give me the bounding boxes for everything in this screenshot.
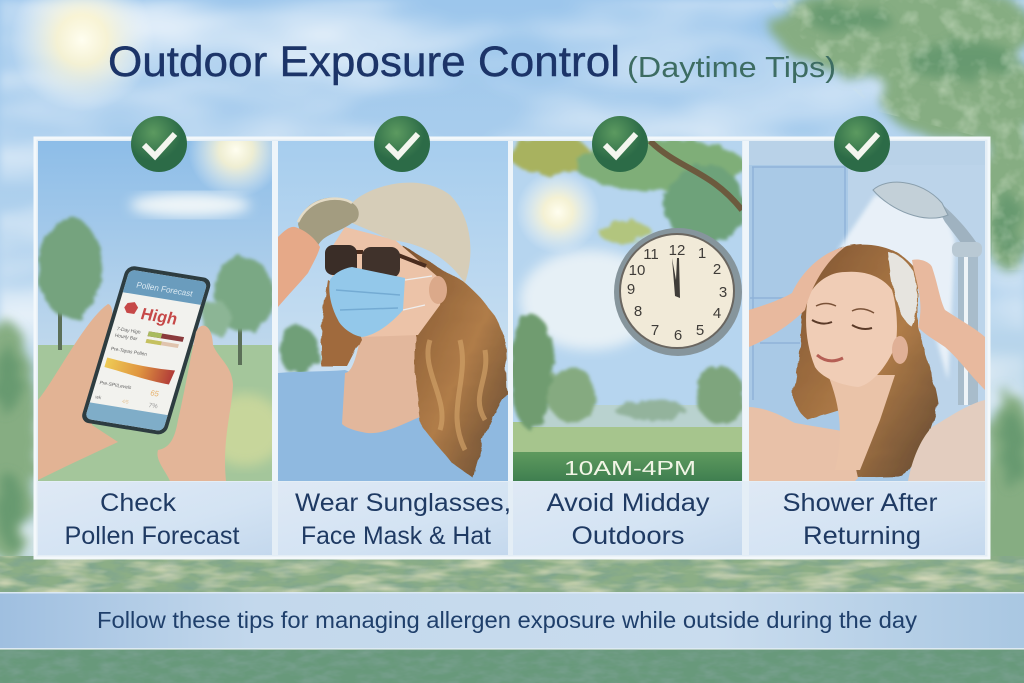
clock: 4 [713,305,721,322]
neck [828,375,895,470]
shoulders [749,407,858,481]
panel: sunglasses, face mask and hat [278,141,508,481]
panel frame: four tips [35,138,989,558]
icon: check badge 4 [834,116,890,172]
shower head [873,182,948,218]
sunglasses [325,245,426,278]
icon: phone showing high pollen: wk [94,394,102,401]
clock: 3 [719,284,727,301]
raised hand [278,227,320,307]
panel: check pollen forecast [38,141,272,481]
icon: phone showing high pollen: Hourly Bar [114,333,138,342]
icon: phone showing high pollen: 7% [148,402,159,410]
label: shower [782,489,938,550]
title: Outdoor Exposure Control [108,38,620,86]
hat [352,183,470,283]
label: check pollen forecast [64,489,240,550]
clock: 2 [713,261,721,278]
clock: 1 [698,245,706,262]
time label: 10AM-4PM [564,458,696,480]
icon: check badge 3 [592,116,648,172]
icon: check badge 1 [131,116,187,172]
water spray [838,195,955,380]
hair [320,245,507,477]
panel: shower [749,141,985,481]
right hand [157,326,233,481]
footer banner [0,592,1024,650]
label: check pollen forecast: Pollen Forecast [64,522,240,550]
face [806,272,897,387]
arms and hands [749,247,845,347]
title: (Daytime Tips) [627,52,836,84]
icon: phone showing high pollen: Pre-Tapas Pollen [110,346,148,358]
clock: 10 [629,262,645,279]
panel: avoid midday [510,135,745,481]
icon: phone showing high pollen [80,265,212,436]
icon: phone showing high pollen: Pre-SPI/Levels [99,380,133,391]
clock: 7 [651,322,659,339]
clock: 5 [696,322,704,339]
foam [888,252,917,327]
icon: phone showing high pollen: High [139,304,180,329]
icon: phone showing high pollen: Pollen Forecast [135,280,195,299]
shirt [278,370,508,481]
label: shower: Shower After [782,489,938,517]
clock: 8 [634,303,642,320]
label: avoid midday: Avoid Midday [546,489,710,517]
clock: 6 [674,327,682,344]
left hand [38,304,118,480]
label: shower: Returning [803,522,921,550]
clock: 12 [669,242,685,259]
title [108,38,836,86]
clock: 11 [643,246,659,263]
label: check pollen forecast: Check [100,489,177,517]
hair back [793,245,938,478]
chest and neck [342,330,420,433]
icon: phone showing high pollen: 7-Day High [116,326,142,336]
icon: phone showing high pollen: 65 [149,388,161,399]
shower pipe [958,255,978,405]
label: avoid midday [546,489,710,550]
label: wear sunglasses: Face Mask & Hat [301,522,491,550]
label: wear sunglasses [295,489,511,550]
label: avoid midday: Outdoors [572,522,684,550]
label: wear sunglasses: Wear Sunglasses, [295,489,511,517]
panel dividers [272,141,749,481]
clock: 9 [627,281,635,298]
caption strips [38,482,985,555]
mask [329,267,432,337]
icon: phone showing high pollen: 4/5 [121,399,130,406]
footer banner: Follow these tips for managing allergen exposure while outside during the day [97,607,918,633]
clock [614,228,742,356]
face [330,227,445,337]
icon: check badge 2 [374,116,430,172]
